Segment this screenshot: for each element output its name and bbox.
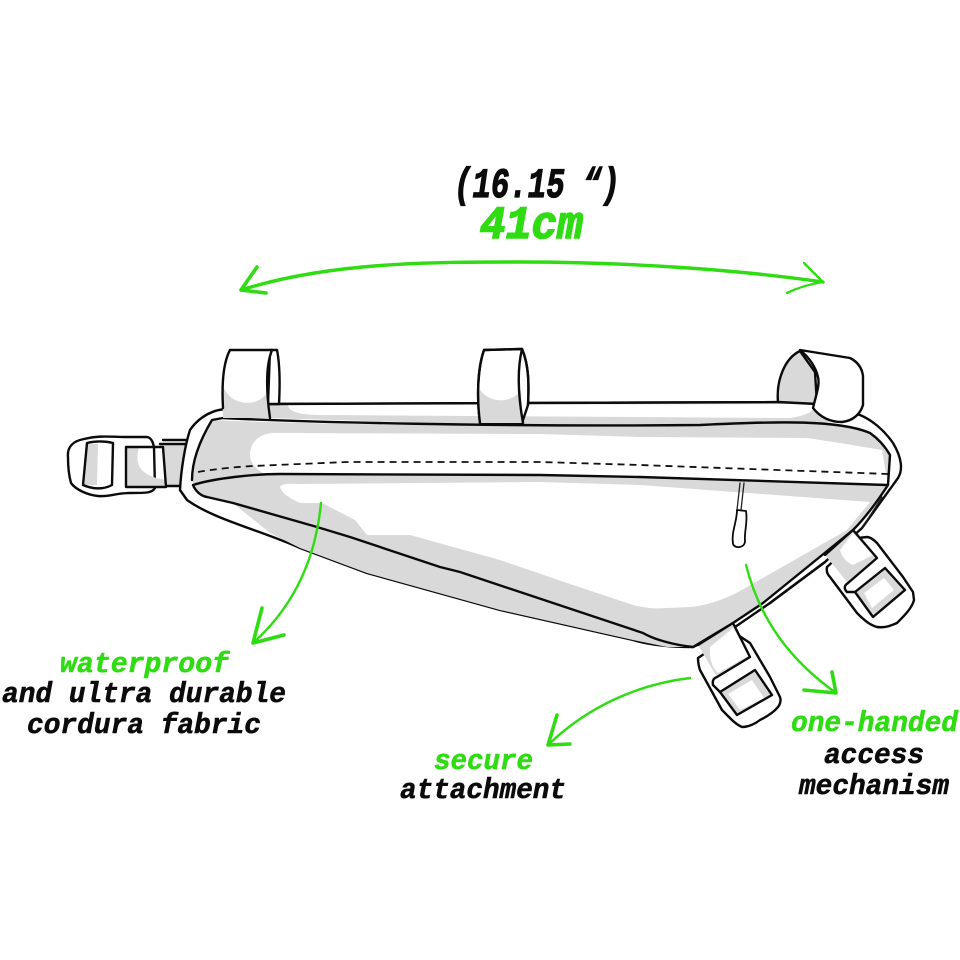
bag seams xyxy=(192,402,890,647)
arrow: length double-headed xyxy=(241,262,823,293)
highlight: upper band xyxy=(250,433,888,485)
strap: left xyxy=(223,350,280,418)
stitched zip line xyxy=(198,462,888,474)
strap: right xyxy=(778,350,863,422)
buckle: bottom xyxy=(698,623,781,727)
callout text: one-handed access: mechanism xyxy=(798,770,949,803)
zipper pull xyxy=(733,483,747,547)
callout text: secure attachment: attachment xyxy=(400,774,566,807)
arrow: one-handed callout xyxy=(746,565,836,693)
highlight: main body xyxy=(280,482,870,608)
top panel strip xyxy=(268,403,835,425)
dimension: inches: (16.15 “) xyxy=(454,162,620,210)
arrow: secure attachment callout xyxy=(548,678,690,745)
callout text: waterproof: waterproof xyxy=(60,648,231,681)
callout text: waterproof xyxy=(2,648,286,742)
callout text: one-handed access: access xyxy=(824,739,924,772)
buckle: right xyxy=(825,530,914,627)
dimension: centimetres: 41cm xyxy=(480,200,583,252)
callout text: one-handed access: one-handed xyxy=(791,707,959,740)
bag main panel xyxy=(193,420,890,647)
left buckle xyxy=(68,436,187,496)
callout text: waterproof: cordura fabric xyxy=(27,709,261,742)
callout text: waterproof: and ultra durable xyxy=(2,678,286,711)
illustration: frame bag xyxy=(68,349,914,727)
callout text: one-handed access xyxy=(791,707,959,803)
arrow: waterproof callout xyxy=(253,503,321,643)
strap: middle xyxy=(478,349,528,423)
callout text: secure attachment xyxy=(400,745,566,807)
callout text: secure attachment: secure xyxy=(434,745,533,778)
bag body xyxy=(180,402,901,647)
